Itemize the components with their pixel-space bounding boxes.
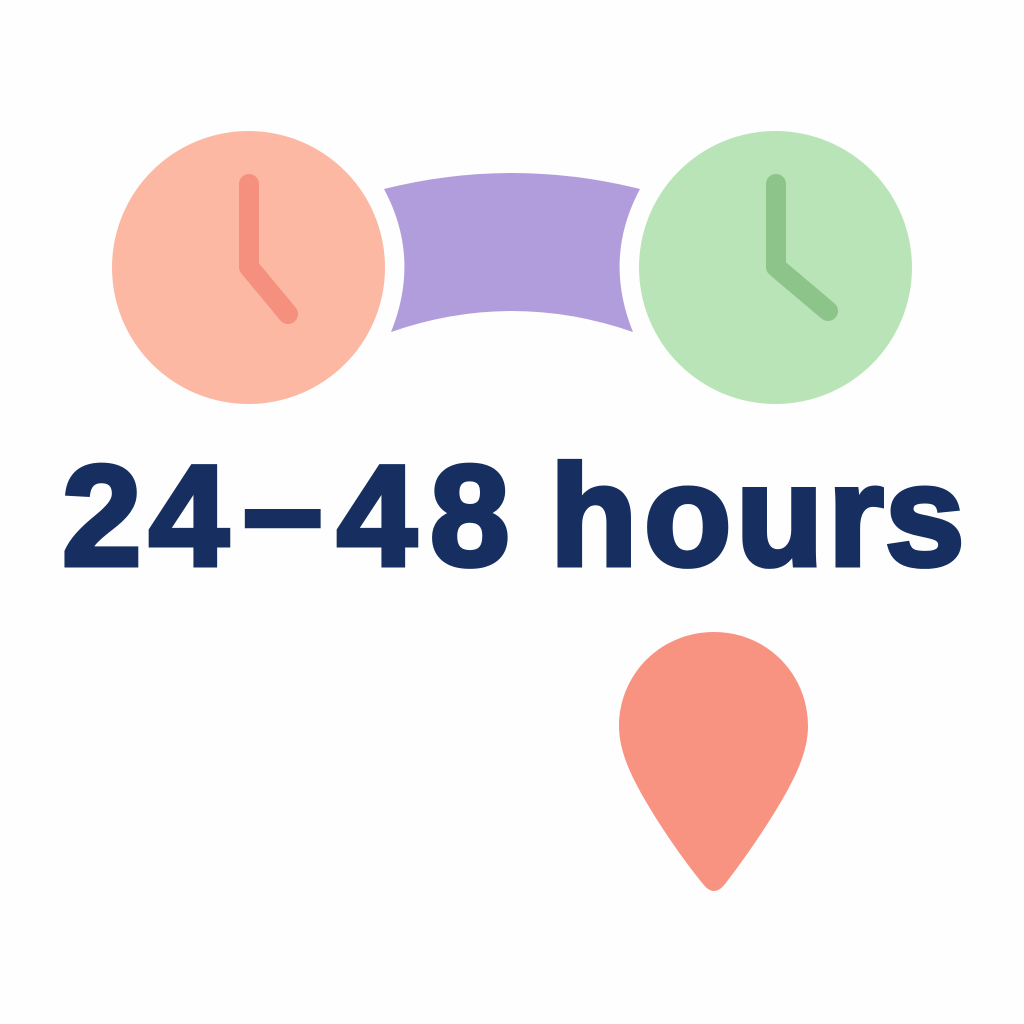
title: 24–48 hours bbox=[62, 429, 965, 596]
icon: start clock bbox=[112, 131, 385, 404]
icon: end clock bbox=[639, 131, 912, 404]
icon: location pin bbox=[619, 632, 808, 891]
connector band bbox=[384, 173, 640, 332]
